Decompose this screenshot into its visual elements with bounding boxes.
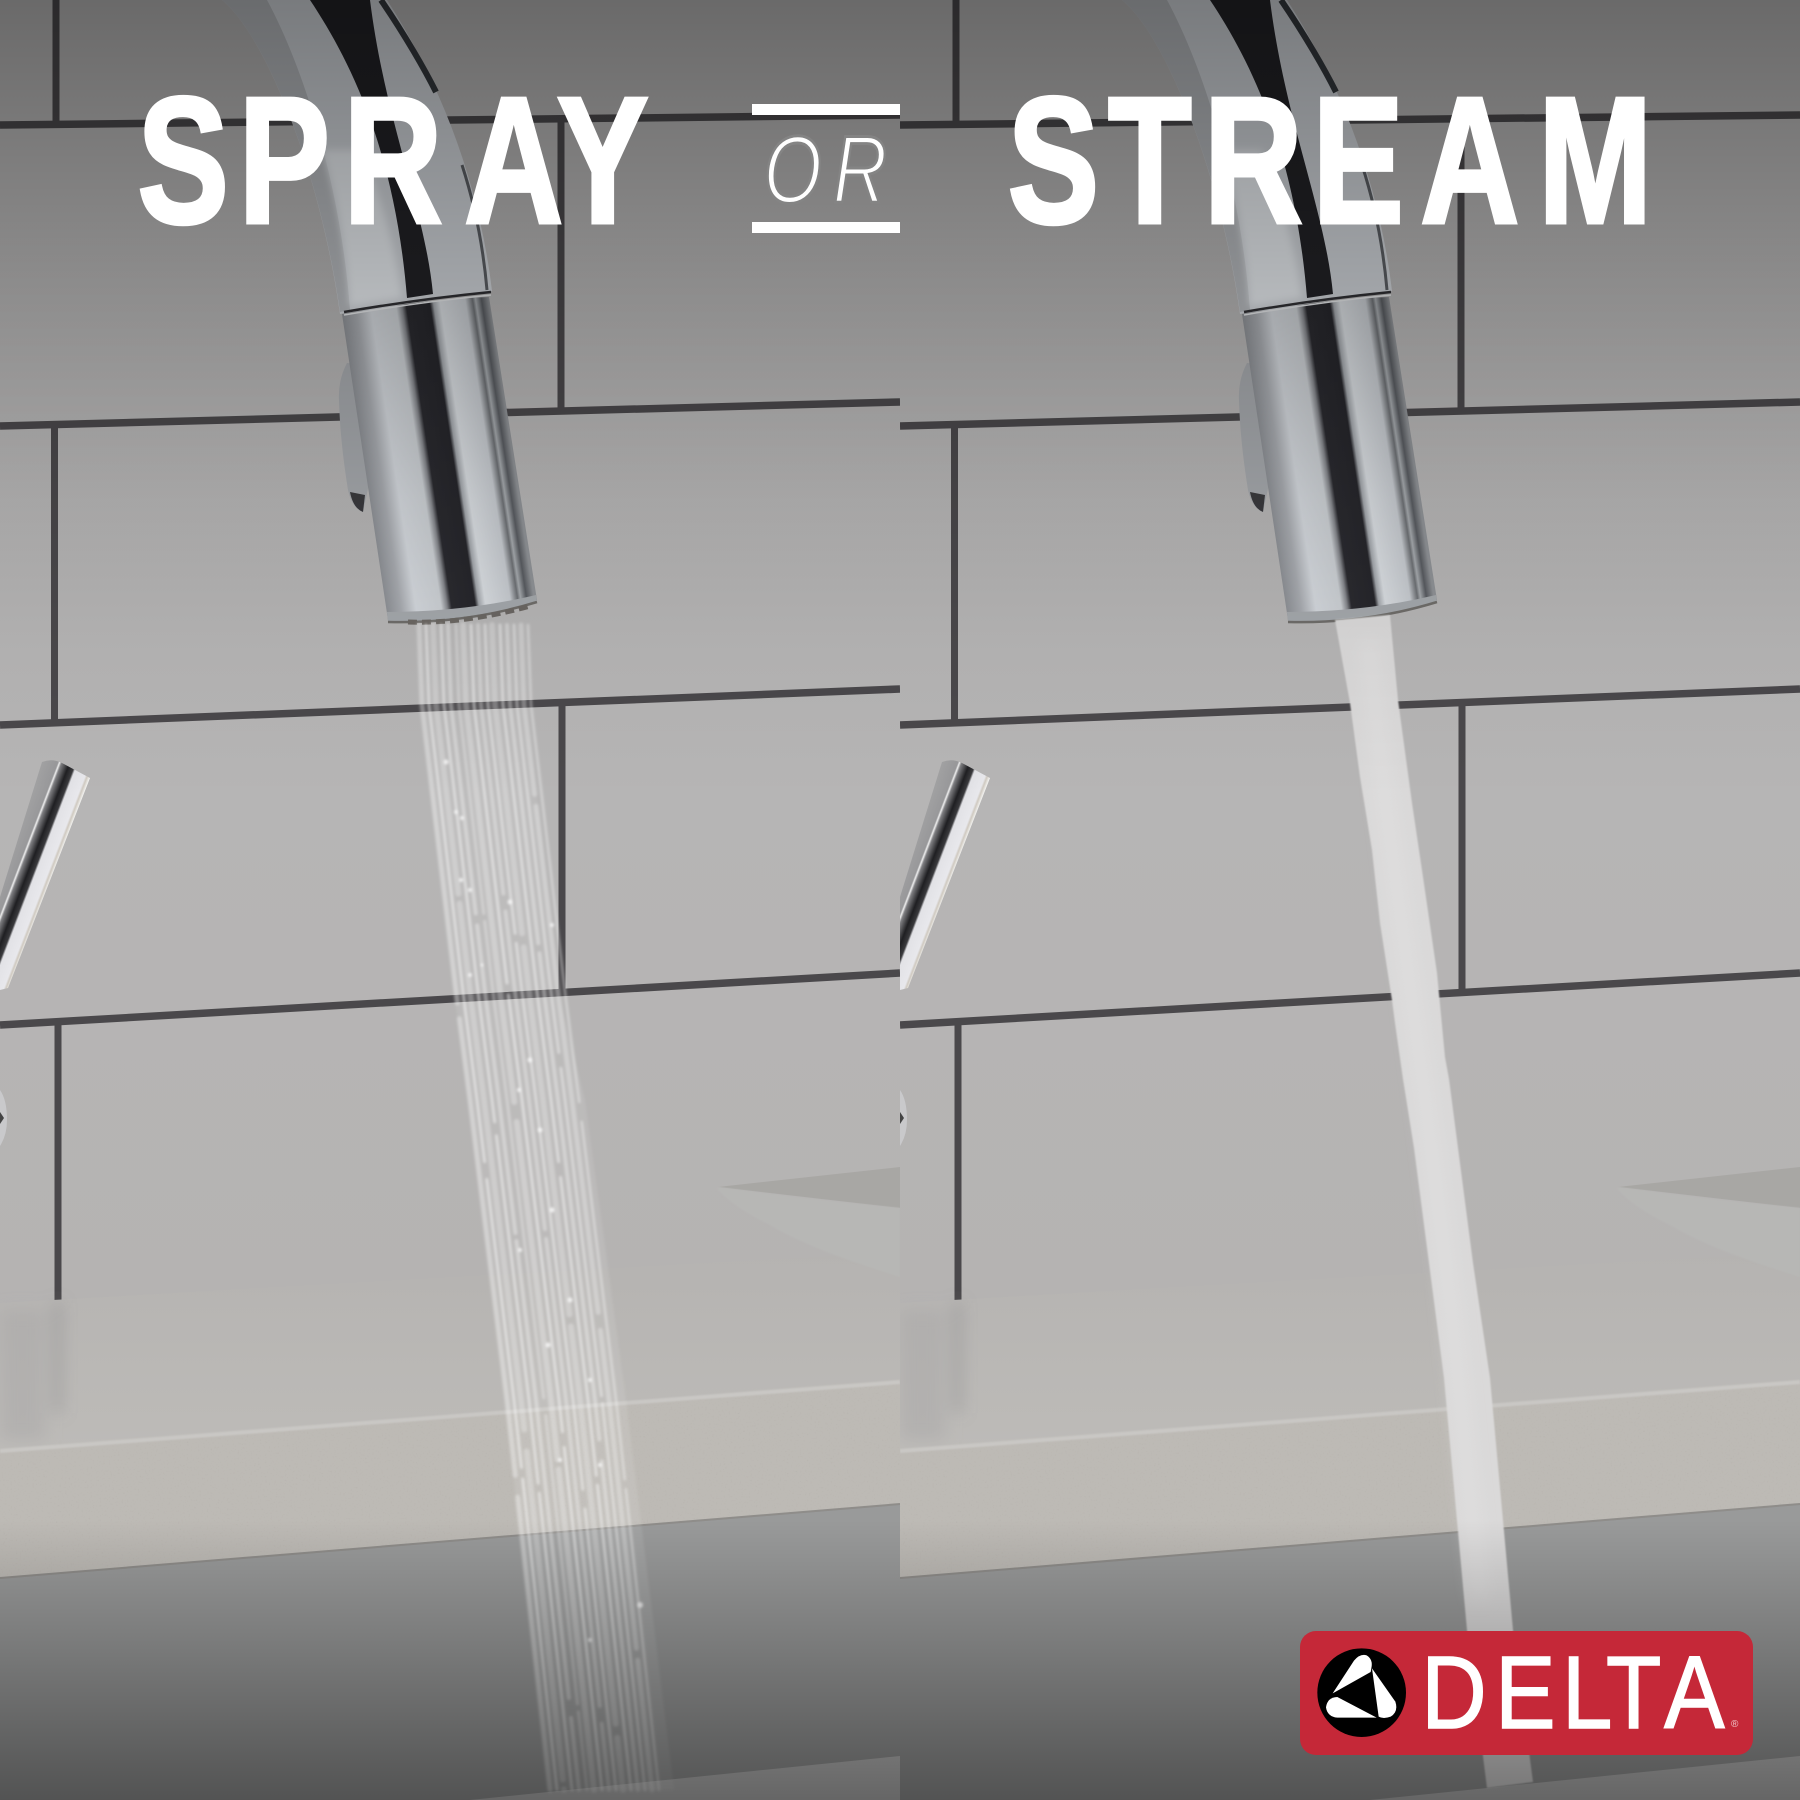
tile wall: [0, 0, 900, 1320]
panel: kitchen scene, stream side: [900, 0, 1800, 1800]
neighbouring handle: [0, 760, 90, 1146]
faucet spray head: [342, 297, 537, 620]
neck dark reflection: [310, 0, 433, 298]
pull-down lever: [339, 363, 372, 512]
heading: STREAM: STREAM: [1008, 59, 1652, 261]
panel: kitchen scene, spray side: [0, 0, 900, 1800]
logo background: [1300, 1631, 1753, 1755]
neck highlight: [322, 150, 402, 306]
heading: SPRAY: SPRAY: [138, 59, 648, 261]
icon: Delta triangle mark: [1317, 1648, 1406, 1737]
neck rim: [381, 0, 436, 92]
bottom bar: [752, 222, 900, 233]
spray nozzles: [408, 606, 530, 622]
logo wordmark: DELTA: [1421, 1635, 1725, 1750]
grout lines: [0, 0, 900, 1303]
cabinet below counter: [0, 1505, 900, 1800]
spray streaks: [419, 625, 659, 1790]
spray water: [417, 625, 674, 1790]
collar seam: [344, 292, 491, 312]
counter top surface: [0, 1252, 900, 1450]
registered mark: ®: [1731, 1719, 1739, 1730]
neck outer band: [222, 0, 350, 312]
counter highlight edge: [0, 1382, 900, 1451]
counter front edge: [0, 1381, 900, 1578]
logo: Delta badge: [1300, 1631, 1753, 1755]
aerator ring: [387, 595, 537, 622]
neck edge line: [462, 165, 487, 290]
stream sheen: [1368, 640, 1480, 1600]
dish on counter: [718, 1167, 900, 1277]
top bar: [752, 104, 900, 115]
faucet neck: [222, 0, 492, 314]
lower shelf: [470, 1756, 900, 1800]
spray droplets: [444, 760, 643, 1642]
OR label: OR: [764, 117, 887, 224]
spray haze: [417, 625, 674, 1790]
stream body: [1335, 615, 1533, 1788]
counter bottom shadow line: [0, 1504, 900, 1578]
divider: OR badge: [752, 104, 900, 233]
faucet: [222, 0, 537, 622]
counter reflections: [0, 1303, 60, 1440]
aerator edge: [388, 602, 537, 622]
stream water: [1335, 615, 1533, 1788]
collar highlight: [344, 295, 491, 315]
